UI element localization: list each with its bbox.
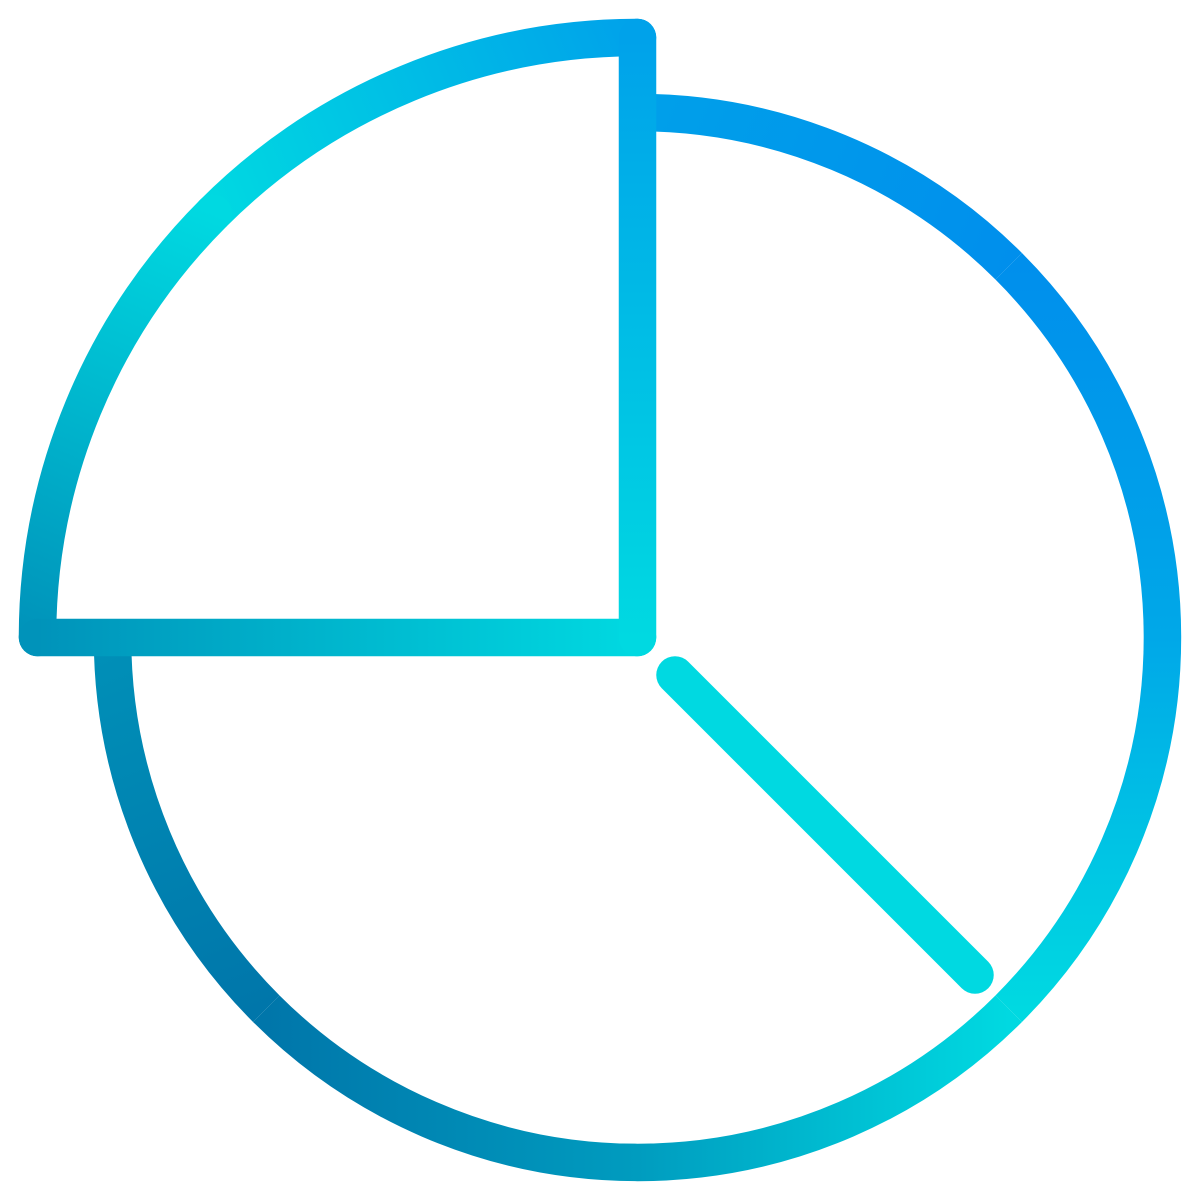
slice divider line xyxy=(675,675,975,975)
detached quarter slice outline xyxy=(37,37,637,637)
main pie circle outline xyxy=(112,112,1162,1162)
